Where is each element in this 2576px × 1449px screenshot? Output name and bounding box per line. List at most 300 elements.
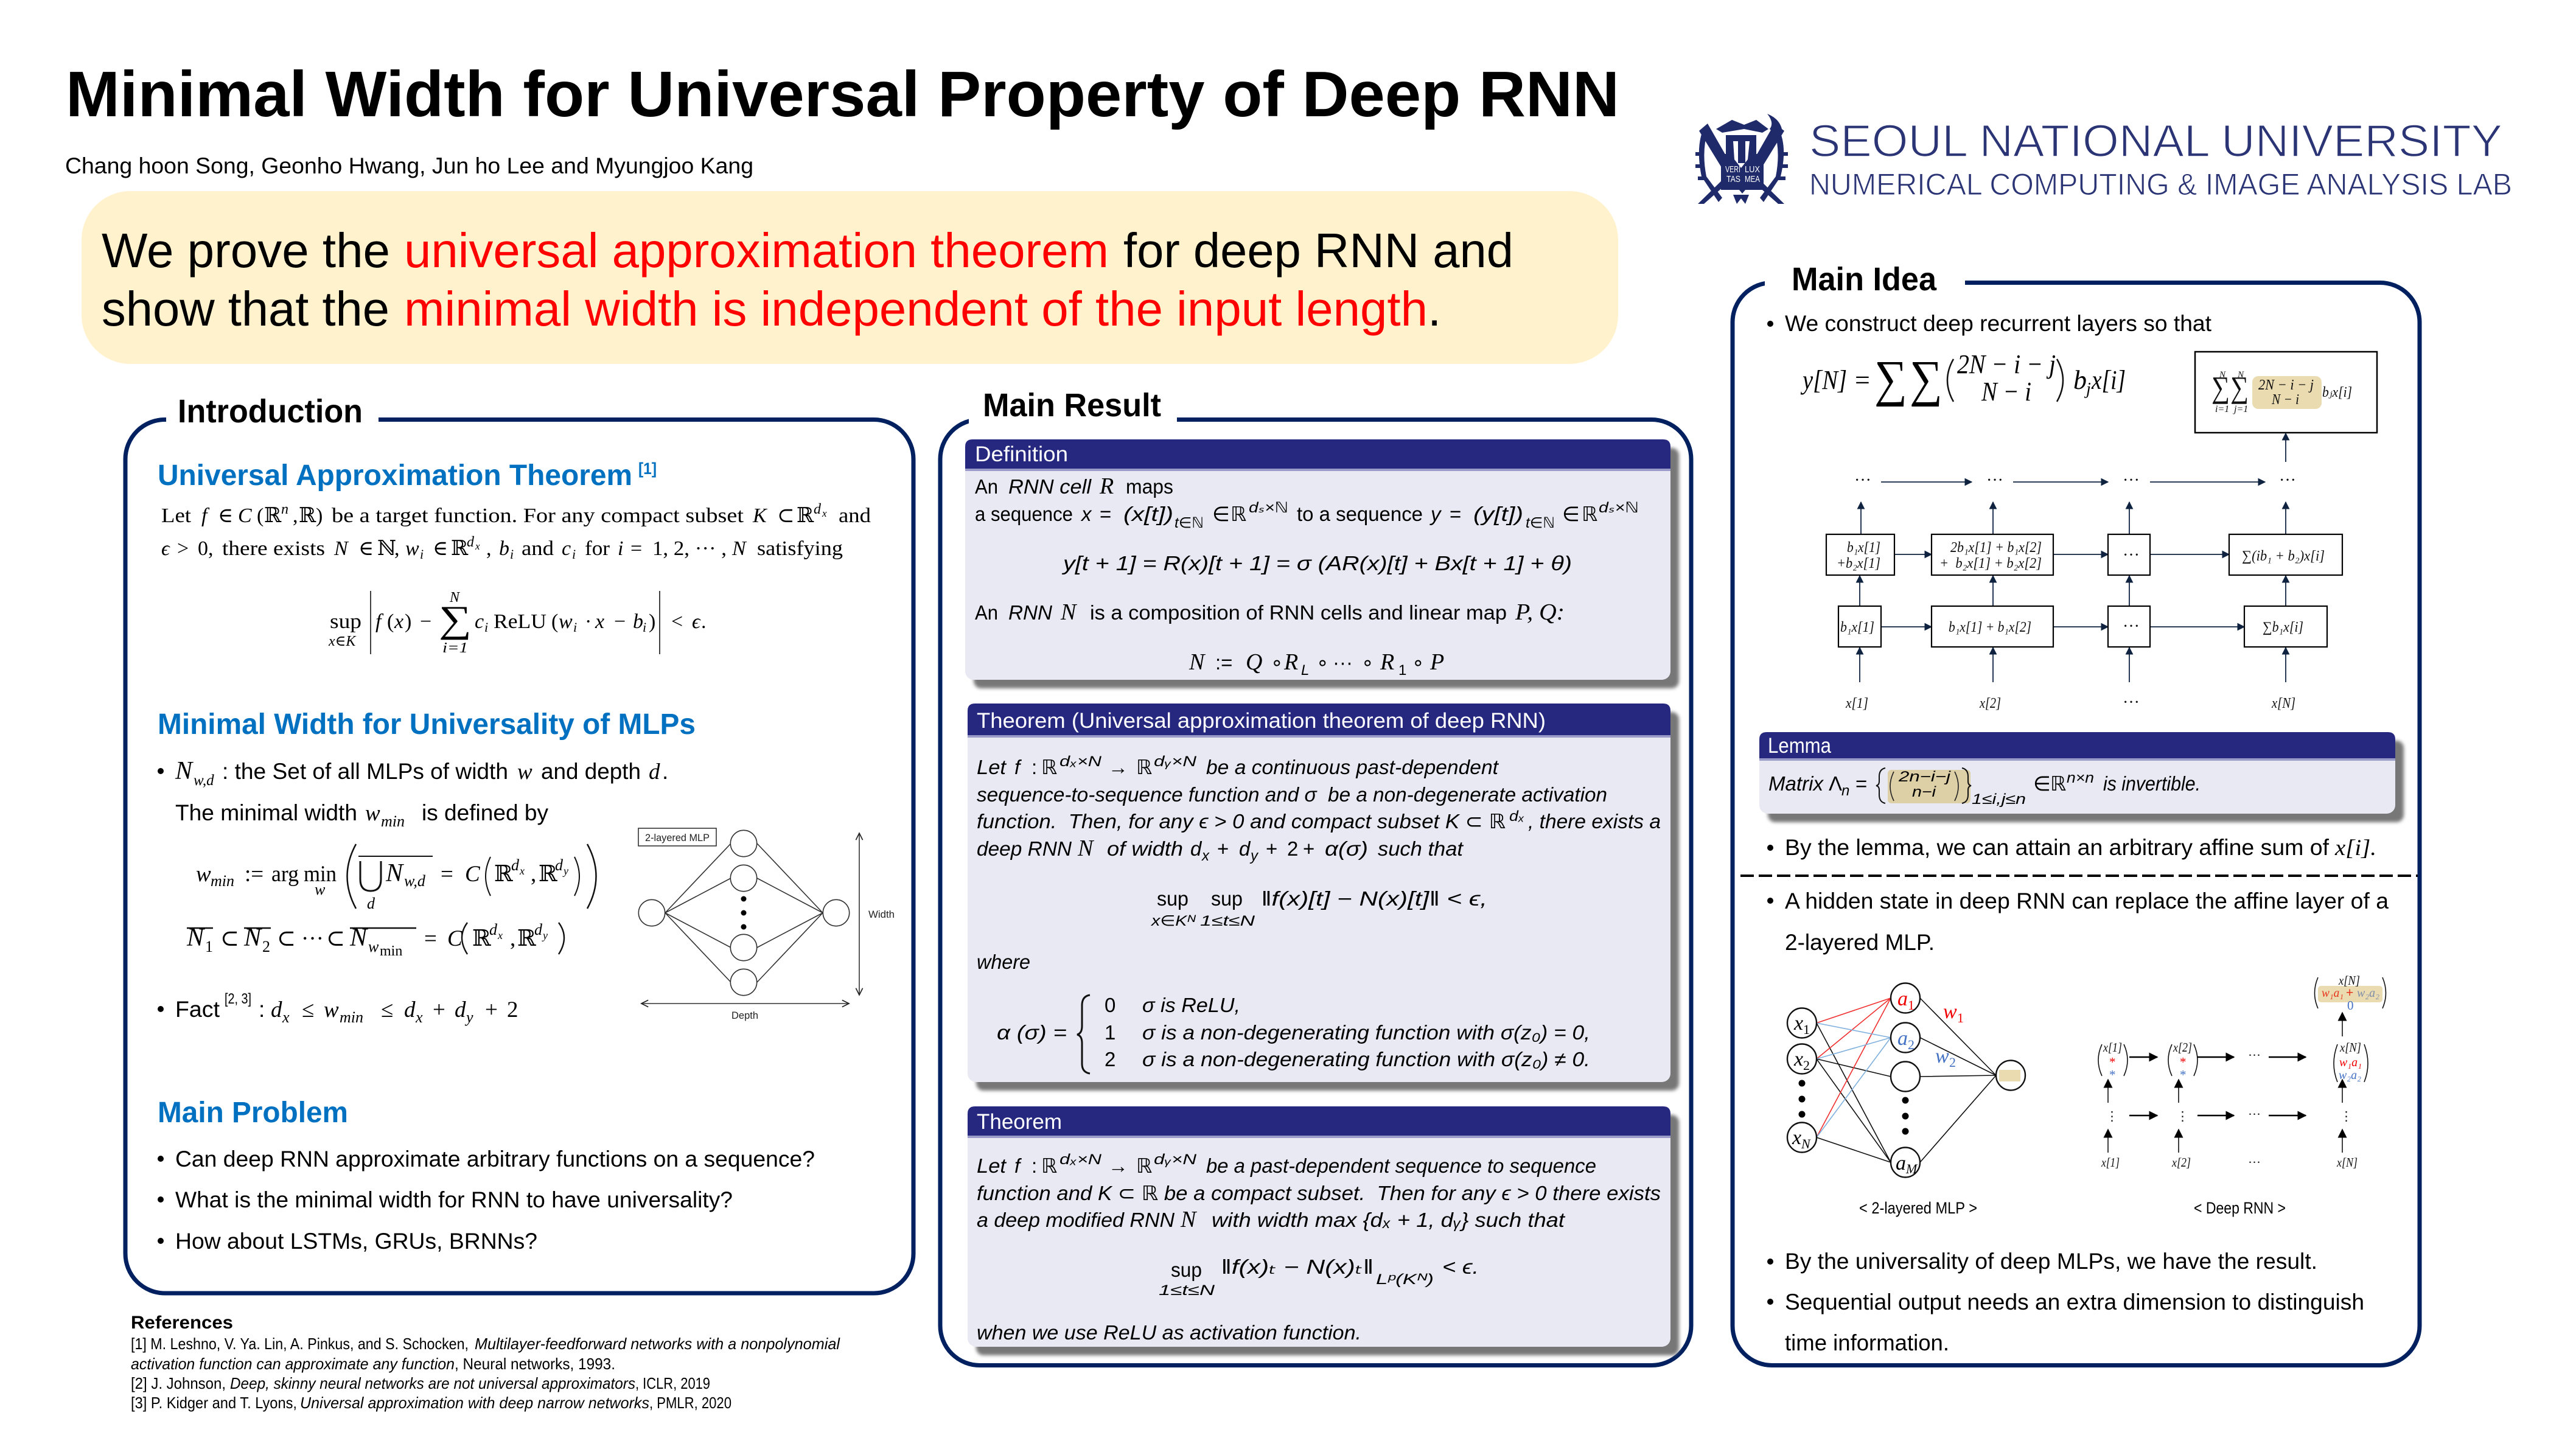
formula: universal approximation inequality: i=1 [442,640,468,656]
bullet: affine sum: x[i]. [2334,836,2376,861]
heading: main result: Main Result [983,387,1161,424]
formula: nested closures: ··· [301,926,324,951]
formula: universal approximation inequality [328,590,706,656]
formula: universal approximation inequality: ReLU [494,610,546,633]
definition of N w,d: and depth [541,759,641,784]
diagram: 2-layered MLP with weights: w [1935,1045,1949,1067]
formula: minimal width definition: w,d [404,872,426,890]
formula: y[N] double sum: ∑ [1910,351,1942,407]
callout: key claim: We prove the [102,223,390,278]
theorem statement: ⊂ [777,505,795,527]
fact about minimal width: d [404,997,416,1022]
block: theorem universal approximation of deep RNN: f [1014,756,1022,778]
block: theorem universal approximation of deep RNN: + [1303,837,1314,860]
diagram: deep RNN replacing affine layer: ⋮ [2176,1109,2189,1123]
icon: crest: MEA [1745,174,1760,184]
theorem statement: ℝ [797,505,814,527]
references: [2] J. Johnson, [131,1374,226,1392]
formula: universal approximation inequality: b [633,610,643,633]
definition of N w,d [158,757,668,830]
logo: Seoul National University crest and lab name: NUMERICAL COMPUTING & IMAGE ANALYSIS LAB [1809,167,2512,201]
panel: main result [940,387,1691,1366]
callout: key claim: show that the [102,282,389,336]
references: Multilayer-feedforward networks with a nonpolynomial [475,1335,840,1353]
block: theorem deep modified RNN: a deep modified RNN [977,1209,1175,1231]
block: lemma: 2n−i−j [1898,769,1951,785]
authors: Chang hoon Song, Geonho Hwang, Jun ho Lee and Myungjoo Kang [65,153,753,178]
block: theorem deep modified RNN: dᵧ×N [1154,1151,1197,1168]
theorem statement: i [618,537,623,560]
block: theorem universal approximation of deep RNN: : [1031,756,1037,778]
definition of N w,d: w [517,759,532,784]
fact about minimal width: x [415,1008,423,1026]
fact about minimal width: y [464,1008,473,1026]
block: theorem universal approximation of deep RNN: d [1190,837,1202,860]
block: theorem deep modified RNN: ℝ [1041,1154,1057,1177]
formula: y[N] double sum: x[i] [2091,365,2126,395]
fact about minimal width: x [282,1008,290,1026]
title: Minimal Width for Universal Property of Deep RNN [66,58,1619,130]
block: theorem universal approximation of deep RNN: ℝ [1041,756,1057,778]
diagram: deep RNN replacing affine layer: * [2180,1067,2186,1082]
formula: nested closures: ℝ [472,926,492,951]
formula: universal approximation inequality: w [559,610,573,633]
diagram: deep RNN replacing affine layer: * [2109,1055,2115,1069]
definition of N w,d: N [175,757,194,785]
diagram: deep RNN replacing affine layer: ··· [2248,1155,2261,1170]
definition of N w,d: min [381,812,405,830]
theorem statement: ) [316,505,323,527]
block: definition: to a sequence [1297,503,1423,525]
diagram: deep recurrent layers: ··· [2123,546,2140,565]
block: lemma: Lemma [1768,734,1831,758]
formula: minimal width definition: x [519,865,525,877]
bullets: result and sequential output: Sequential output needs an extra dimension to distinguish [1785,1290,2364,1315]
block: theorem universal approximation of deep RNN: sequence-to-sequence function and σ be a non-degenerate activation [977,783,1607,806]
formula: y[N] double sum: N − i [1981,377,2031,407]
formula: nested closures: d [534,921,543,938]
block: definition: Q [1246,649,1262,675]
fact about minimal width: Fact [175,997,220,1022]
theorem statement: , [394,537,399,560]
block: theorem universal approximation of deep RNN: Let [977,756,1007,778]
theorem statement: N [333,537,349,560]
formula: y[N] double sum [1800,349,2126,407]
formula: minimal width definition: = [441,862,453,887]
main problem bullets: Can deep RNN approximate arbitrary functions on a sequence? [175,1147,815,1171]
bullet: construct deep recurrent layers: We construct deep recurrent layers so that [1785,311,2212,336]
theorem statement: d [814,501,822,517]
diagram: deep recurrent layers: b₁x[1] [1847,540,1880,556]
fact about minimal width: d [271,997,282,1022]
theorem statement: ℕ [377,537,396,560]
block: theorem deep modified RNN: sup [1171,1259,1202,1281]
block: theorem universal approximation of deep RNN: sup [1157,887,1189,910]
block: definition: ··· [1333,651,1353,674]
formula: nested closures: ⊂ [326,926,345,951]
block: lemma: Λ [1829,772,1842,795]
diagram: deep recurrent layers: b₁x[1] + b₁x[2] [1949,620,2031,635]
theorem statement: N [731,537,747,560]
block: theorem deep modified RNN: 1≤t≤N [1159,1282,1215,1299]
formula: minimal width definition: min [304,862,337,887]
diagram: deep RNN replacing affine layer: ⋮ [2106,1109,2118,1123]
fact about minimal width: d [455,997,466,1022]
block: theorem deep modified RNN: N [1180,1207,1198,1232]
block: theorem deep modified RNN: Theorem [977,1110,1062,1134]
references: [1] M. Leshno, V. Ya. Lin, A. Pinkus, and S. Schocken, [131,1335,469,1353]
diagram: deep recurrent layers: ··· [1986,471,2003,490]
diagram: deep RNN replacing affine layer: x[N] [2339,1040,2361,1055]
block: theorem universal approximation of deep RNN: such that [1378,837,1464,860]
block: lemma: n−i [1912,784,1936,800]
block: theorem universal approximation of deep RNN: α (σ) = [997,1021,1067,1044]
theorem statement: 1, 2, ··· , [652,537,727,560]
block: theorem universal approximation of deep RNN: + [1266,837,1277,860]
formula: minimal width definition: min [211,872,234,890]
block: definition: t∈ℕ [1526,515,1555,531]
definition of N w,d: : the Set of all MLPs of width [222,759,508,784]
theorem statement: K [752,505,768,527]
formula: y[N] double sum: = [1855,365,1870,395]
formula: universal approximation inequality: − [420,610,431,633]
references: Deep, skinny neural networks are not universal approximators [230,1374,635,1392]
formula: universal approximation inequality: i [643,620,646,635]
block: lemma: 1≤i,j≤n [1972,791,2026,808]
fact about minimal width: + [485,997,498,1022]
heading: Introduction: Introduction [178,393,363,430]
theorem statement: i [572,546,576,562]
theorem statement: f [201,505,210,527]
formula: universal approximation inequality: ) [405,610,411,633]
formula: nested closures: 2 [262,938,270,955]
formula: universal approximation inequality: ( [551,610,558,633]
formula: universal approximation inequality: i [484,620,488,635]
block: theorem deep modified RNN: f [1014,1154,1022,1177]
formula: y[N] double sum: ∑ [1874,351,1907,407]
block: definition: RNN [1008,601,1052,624]
block: theorem deep modified RNN: Let [977,1154,1007,1177]
diagram: 2-layered MLP with weights: w [1943,1000,1957,1023]
block: theorem universal approximation of deep RNN: function. Then, for any ϵ > 0 and compact subset K ⊂ ℝ [977,810,1506,833]
icon: crest: VERI [1725,164,1740,175]
fact about minimal width: ≤ [381,997,393,1022]
formula: nested closures: d [489,921,498,938]
block: theorem deep modified RNN [968,1106,1679,1355]
block: definition [965,439,1679,688]
block: definition: An [975,601,998,624]
block: theorem deep modified RNN: when we use ReLU as activation function. [977,1321,1361,1344]
block: definition: ∘ [1361,651,1374,674]
panel: introduction [125,389,913,1293]
diagram: deep RNN replacing affine layer: w₁a₁ [2322,985,2344,1000]
formula: minimal width definition: d [555,856,564,874]
diagram: deep recurrent layers: 2N − i − j [2258,377,2314,393]
fact about minimal width: : [259,997,265,1022]
logo: Seoul National University crest and lab name [1695,114,2512,204]
bullets: result and sequential output: By the universality of deep MLPs, we have the result. [1785,1249,2317,1274]
diagram: 2-layered MLP with weights: x [1793,1048,1803,1070]
theorem statement: c [562,537,571,560]
bullet: hidden state: A hidden state in deep RNN can replace the affine layer of a [1785,889,2389,913]
theorem statement: n [281,501,288,517]
formula: minimal width definition: d [511,856,520,874]
block: theorem universal approximation of deep RNN: 1≤t≤N [1200,913,1255,929]
bullets: result and sequential output: time information. [1785,1330,1949,1355]
bullets: result and sequential output [1767,1249,2364,1355]
diagram: deep RNN replacing affine layer: x[N] [2336,1155,2358,1170]
formula: nested closures: ⊂ [220,926,239,951]
block: definition: R [1380,649,1394,675]
diagram: deep recurrent layers: N [2219,370,2226,380]
block: definition: 1 [1398,662,1406,679]
block: theorem universal approximation of deep RNN: where [977,951,1030,973]
block: theorem universal approximation of deep RNN: x [1201,848,1210,864]
diagram: 2-layered MLP with weights: 2 [1908,1037,1915,1052]
diagram: deep RNN replacing affine layer: x[N] [2338,973,2360,988]
theorem statement: 0, [198,537,213,560]
diagram: 2-layered MLP with weights: x [1793,1012,1803,1035]
formula: universal approximation inequality: x [394,610,403,633]
theorem statement: ∈ [433,537,448,560]
block: definition: a sequence [975,503,1073,525]
block: theorem universal approximation of deep RNN: dᵧ×N [1154,753,1197,770]
block: definition: ℝ [1230,503,1246,525]
block: definition: Definition [975,442,1068,466]
diagram: 2-layered MLP with weights: 1 [1803,1022,1810,1037]
formula: nested closures: x [497,929,503,941]
block: theorem universal approximation of deep RNN: N [1077,836,1095,861]
block: theorem deep modified RNN: ‖f(x)ₜ − N(x)ₜ‖ [1221,1255,1374,1278]
block: theorem universal approximation of deep RNN: σ is a non-degenerating function with σ(z₀) ≠ 0. [1142,1048,1590,1070]
block: theorem universal approximation of deep RNN: ‖f(x)[t] − N(x)[t]‖ < ϵ, [1261,887,1487,910]
block: theorem universal approximation of deep RNN: of width [1107,837,1183,860]
formula: universal approximation inequality: i [573,620,577,635]
theorem statement: be a target function. For any compact subset [332,505,744,527]
diagram: deep recurrent layers: ··· [2123,693,2140,712]
references: , ICLR, 2019 [635,1374,710,1392]
formula: universal approximation inequality: . [701,610,706,633]
theorem statement: for [585,537,610,560]
formula: minimal width definition: C [465,862,481,887]
block: theorem universal approximation of deep RNN: α(σ) [1325,837,1368,860]
block: definition: ∈ [1212,503,1230,525]
theorem statement: i [420,546,424,562]
diagram: 2-layered MLP: Width [868,909,895,920]
theorem statement: x [475,540,480,552]
definition of N w,d: . [662,759,668,784]
diagram: deep RNN replacing affine layer: ··· [2248,1048,2261,1063]
block: definition: ∘ [1412,651,1425,674]
diagram: deep recurrent layers: ··· [2123,617,2140,636]
diagram: deep recurrent layers: N [2237,370,2244,380]
block: theorem universal approximation of deep RNN [968,704,1679,1091]
formula: universal approximation inequality: ϵ [692,610,701,633]
block: lemma: n [1841,783,1849,799]
diagram: 2-layered MLP with weights: 1 [1957,1010,1964,1025]
heading: universal approximation theorem: Universal Approximation Theorem [158,459,632,492]
diagram: 2-layered MLP: Depth [731,1010,758,1021]
theorem statement: ∈ [218,505,233,527]
block: theorem deep modified RNN: be a past-dependent sequence to sequence [1206,1154,1596,1177]
block: definition: y[t + 1] = R(x)[t + 1] = σ (AR(x)[t] + Bx[t + 1] + θ) [1062,552,1572,574]
theorem statement: ( [257,505,264,527]
theorem statement: w [405,537,419,560]
formula: nested closures: N [186,924,205,952]
block: lemma [1759,732,2404,822]
formula: universal approximation inequality: c [475,610,484,633]
theorem statement: ℝ [451,537,469,560]
block: theorem universal approximation of deep RNN: y [1249,848,1259,864]
references: , Neural networks, 1993. [455,1355,615,1373]
block: theorem universal approximation of deep RNN: dₓ×N [1059,753,1102,770]
diagram: deep recurrent layers: ∑b₁x[i] [2263,620,2303,635]
diagram: deep recurrent layers: ··· [2279,471,2296,490]
panel: main idea [1733,256,2420,1366]
diagram: deep recurrent layers: ∑(ib₁ + b₂)x[i] [2242,548,2325,564]
block: definition: R [1099,473,1114,499]
formula: nested closures: N [243,924,262,952]
theorem statement: , [293,505,298,527]
theorem statement: ϵ [161,537,170,560]
formula: nested closures: ⊂ [277,926,296,951]
definition of N w,d: is defined by [422,800,548,825]
block: theorem deep modified RNN: function and K ⊂ ℝ be a compact subset. Then for any ϵ > 0 there exists [977,1182,1661,1204]
theorem statement: satisfying [757,537,843,560]
callout: key claim: universal approximation theorem [404,223,1109,278]
block: theorem deep modified RNN: → [1108,1154,1128,1177]
diagram: deep RNN replacing affine layer: w₂a₂ [2357,985,2379,1000]
definition of N w,d: The minimal width [175,800,357,825]
caption: 2-layered MLP: < 2-layered MLP > [1859,1199,1977,1217]
diagram: deep RNN replacing affine layer: ··· [2248,1107,2261,1122]
block: definition: R [1283,649,1298,675]
theorem statement: > [177,537,189,560]
fact about minimal width: ≤ [302,997,314,1022]
callout: key claim [82,191,1618,364]
diagram: deep recurrent layers: +b₂x[1] [1837,556,1880,571]
block: definition: An [975,475,998,498]
diagram: deep recurrent layers: bⱼx[i] [2322,385,2352,400]
formula: universal approximation inequality: f [375,610,384,633]
formula: minimal width definition: ℝ [494,862,514,887]
block: definition: ∈ [1562,503,1580,525]
diagram: deep RNN replacing affine layer: x[2] [2173,1040,2192,1055]
diagram: deep recurrent layers: 2b₁x[1] + b₁x[2] [1950,540,2042,556]
callout: key claim: . [1428,282,1441,336]
block: definition: y [1429,503,1442,525]
block: definition: ∘ [1271,651,1283,674]
formula: universal approximation inequality: x [595,610,604,633]
block: lemma: = [1855,772,1867,795]
diagram: deep RNN replacing affine layer: * [2109,1067,2115,1082]
block: theorem universal approximation of deep RNN: ℝ [1136,756,1152,778]
main problem bullets [158,1147,815,1254]
diagram: deep recurrent layers [1826,352,2377,712]
formula: universal approximation inequality: ∑ [439,599,472,640]
diagram: 2-layered MLP [638,828,895,1021]
theorem statement: there exists [222,537,325,560]
icon: crest: LUX [1745,164,1760,175]
definition of N w,d: w [365,801,380,826]
block: definition: t∈ℕ [1175,515,1204,531]
references: [3] P. Kidger and T. Lyons, [131,1394,297,1412]
theorem statement: d [467,534,475,550]
formula: minimal width definition: w [196,862,211,887]
theorem statement: = [630,537,642,560]
references: Universal approximation with deep narrow networks [300,1394,649,1412]
block: definition: P, Q: [1515,599,1565,625]
formula: nested closures: , [510,926,515,951]
theorem statement [161,501,871,562]
block: lemma: is invertible. [2103,772,2201,795]
formula: nested closures: min [380,943,402,959]
formula: minimal width definition: N [385,859,404,887]
diagram: deep RNN replacing affine layer: x[2] [2171,1155,2191,1170]
block: definition: = [1100,503,1111,525]
diagram: 2-layered MLP with weights: a [1896,1152,1906,1175]
block: theorem universal approximation of deep RNN: sup [1211,887,1243,910]
theorem statement: and [839,505,871,527]
references: References [131,1313,233,1333]
block: lemma: Matrix [1768,772,1824,795]
block: theorem universal approximation of deep RNN: deep RNN [977,837,1072,860]
block: definition: is a composition of RNN cells and linear map [1090,601,1507,624]
diagram: 2-layered MLP with weights: 1 [1908,997,1915,1013]
diagram: deep RNN replacing affine layer: ⋮ [2340,1109,2353,1123]
formula: universal approximation inequality: · [585,610,592,633]
theorem statement: and [522,537,554,560]
block: theorem universal approximation of deep RNN: → [1108,756,1128,778]
icon: crest [1695,114,1788,204]
block: theorem universal approximation of deep RNN: 2 [1105,1048,1115,1070]
formula: nested closures: N [349,924,368,952]
bullet: hidden state [1767,889,2389,955]
formula: minimal width definition: w [315,881,326,898]
theorem statement: b [499,537,509,560]
theorem statement: ℝ [264,505,282,527]
block: definition: dₛ×ℕ [1599,500,1639,516]
diagram: deep RNN replacing affine layer: x[1] [2101,1155,2120,1170]
block: theorem universal approximation of deep RNN: σ is a non-degenerating function with σ(z₀) = 0, [1142,1021,1590,1044]
caption: deep RNN: < Deep RNN > [2194,1199,2286,1217]
formula: universal approximation inequality: ( [387,610,394,633]
formula: universal approximation inequality: N [449,590,461,606]
formula: nested closures [186,921,564,959]
definition of N w,d: w,d [194,772,214,789]
block: definition: ℝ [1582,503,1597,525]
diagram: deep recurrent layers: + b₂x[1] + b₂x[2] [1939,556,2042,571]
theorem statement: ℝ [299,505,316,527]
formula: minimal width definition: y [562,865,568,877]
block: definition: := [1215,651,1232,674]
block: definition: (y[t]) [1473,503,1523,525]
fact about minimal width: [2, 3] [225,991,251,1007]
diagram: deep recurrent layers: x[1] [1845,696,1868,711]
theorem statement: C [238,505,252,527]
block: definition: P [1429,649,1444,675]
block: definition: RNN cell [1008,475,1092,498]
block: theorem universal approximation of deep RNN: 1 [1105,1021,1115,1044]
formula: minimal width definition: arg [271,862,299,887]
heading: minimal width for universality of MLPs: Minimal Width for Universality of MLPs [158,708,696,741]
diagram: 2-layered MLP: 2-layered MLP [645,832,710,843]
block: definition: x [1080,503,1092,525]
theorem statement: i [510,546,514,562]
block: theorem universal approximation of deep RNN: + [1217,837,1229,860]
block: definition: = [1450,503,1461,525]
formula: minimal width definition [196,844,596,912]
